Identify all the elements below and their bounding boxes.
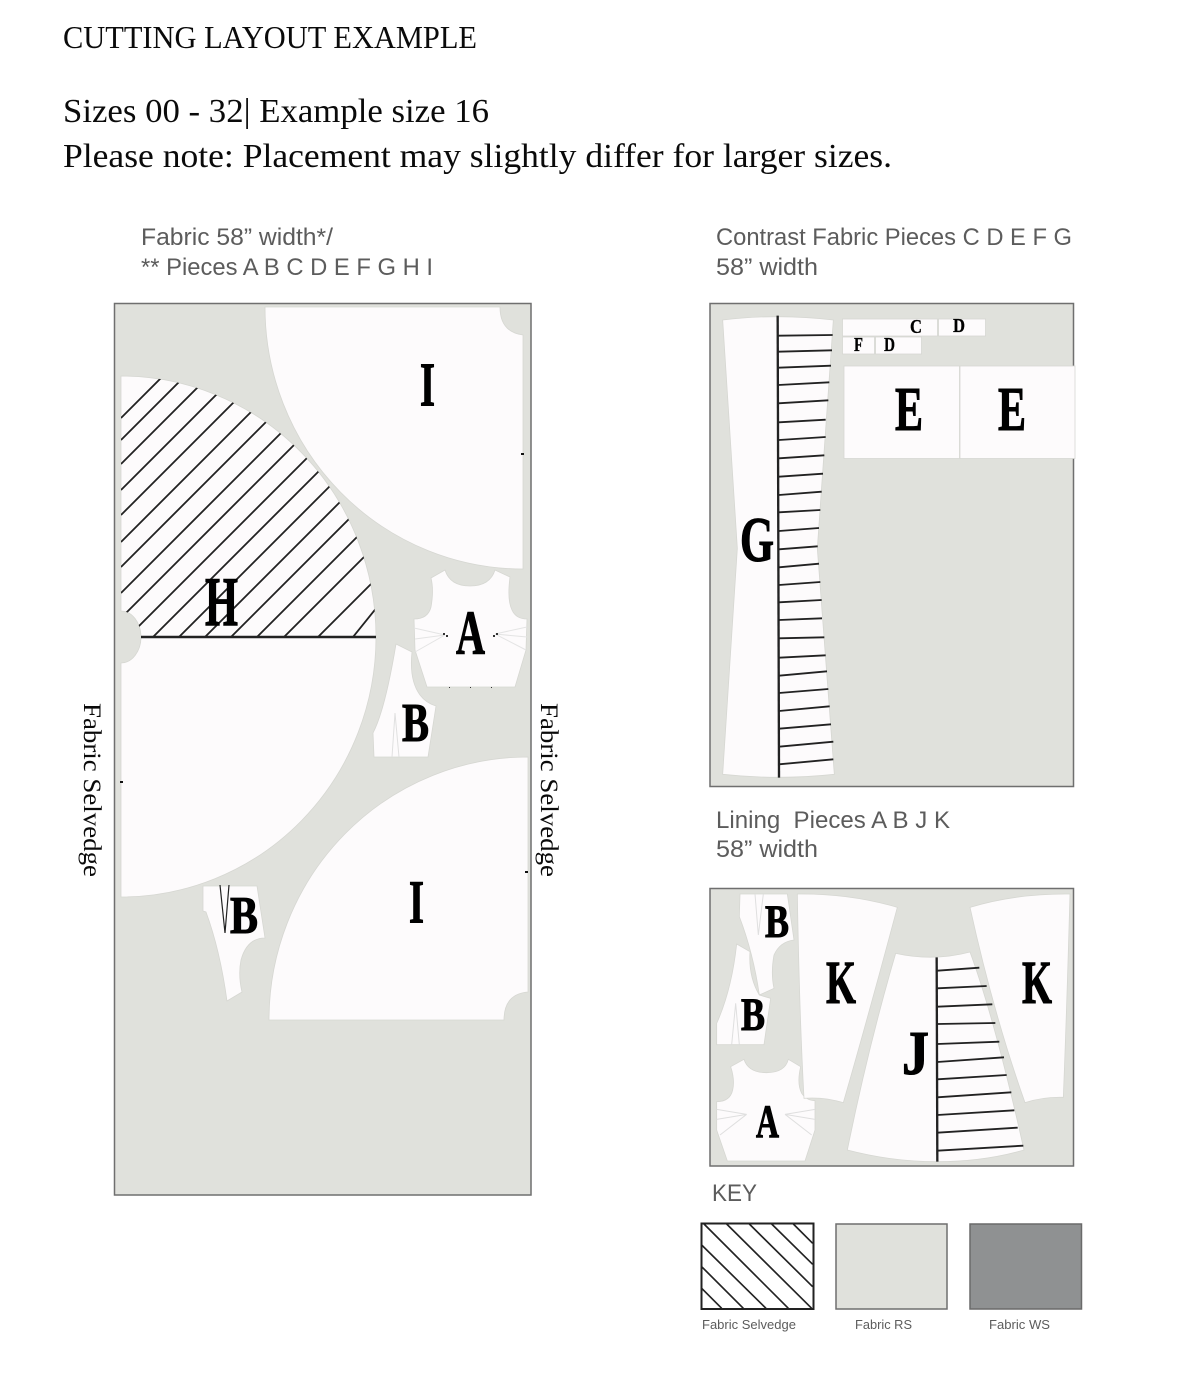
piece: H folded circle (120, 376, 376, 897)
note: placement: Please note: Placement may slightly differ for larger sizes. (63, 138, 892, 175)
key label: selvedge: Fabric Selvedge (702, 1317, 796, 1332)
piece: F: F (854, 334, 863, 356)
piece: B top: B (765, 896, 789, 948)
piece: A bodice: A (456, 600, 485, 668)
heading: contrast fabric: 58” width (716, 254, 818, 281)
piece: D lower (876, 334, 922, 356)
heading: contrast fabric (716, 224, 1072, 281)
piece: E right: E (998, 376, 1026, 444)
subtitle: sizes: Sizes 00 - 32| Example size 16 (63, 93, 489, 130)
piece: B bottom (717, 944, 771, 1045)
heading: main fabric layout: Fabric 58” width*/ (141, 224, 333, 251)
piece: G facing (723, 316, 834, 778)
heading: contrast fabric: Contrast Fabric Pieces C D E F G (716, 224, 1072, 251)
piece: D lower: D (884, 334, 895, 356)
piece: K right (970, 894, 1070, 1103)
piece: E left (844, 366, 960, 458)
piece: I lower (269, 757, 528, 1020)
label: right selvedge: Fabric Selvedge (535, 703, 562, 877)
panel: main fabric layout (114, 302, 532, 1196)
piece: I top (265, 307, 524, 569)
piece: H folded circle: H (205, 564, 238, 641)
piece: B upper: B (402, 692, 429, 753)
heading: main fabric layout: ** Pieces A B C D E F G H I (141, 254, 433, 281)
piece: B lower: B (230, 887, 258, 945)
piece: B lower (203, 885, 265, 1001)
piece: F (842, 334, 874, 356)
key label: WS: Fabric WS (989, 1317, 1050, 1332)
heading: lining (716, 807, 950, 863)
key heading: KEY (712, 1180, 757, 1207)
piece: D top: D (953, 315, 965, 337)
piece: G facing: G (740, 504, 774, 575)
heading: main fabric layout (141, 224, 433, 281)
piece: A bodice: A (756, 1096, 779, 1148)
piece: K left: K (826, 950, 856, 1017)
piece: C (842, 316, 938, 338)
piece: B top (739, 894, 794, 995)
piece: K right: K (1022, 950, 1052, 1017)
piece: B upper (373, 644, 436, 757)
piece: D top (938, 315, 986, 337)
piece: B bottom: B (741, 989, 765, 1041)
heading: lining: Lining Pieces A B J K (716, 807, 950, 834)
piece: E left: E (895, 376, 923, 444)
key: fabric selvedge swatch (702, 1224, 814, 1309)
key: fabric WS swatch (970, 1224, 1082, 1309)
piece: A bodice (717, 1059, 815, 1161)
key: fabric RS swatch (836, 1224, 947, 1309)
label: left selvedge: Fabric Selvedge (78, 703, 105, 877)
piece: I top: I (420, 352, 435, 420)
panel: lining layout (710, 888, 1074, 1166)
hatching: fabric selvedge (121, 378, 375, 636)
piece: J folded (847, 952, 1024, 1162)
panel: contrast fabric layout (710, 304, 1075, 786)
piece: A bodice (414, 570, 527, 688)
piece: K left (797, 894, 897, 1103)
title: CUTTING LAYOUT EXAMPLE (63, 19, 477, 55)
piece: E right (960, 366, 1075, 458)
piece: J folded: J (902, 1020, 929, 1088)
piece: C: C (910, 316, 922, 338)
key label: RS: Fabric RS (855, 1317, 912, 1332)
piece: I lower: I (409, 870, 424, 936)
heading: lining: 58” width (716, 836, 818, 863)
